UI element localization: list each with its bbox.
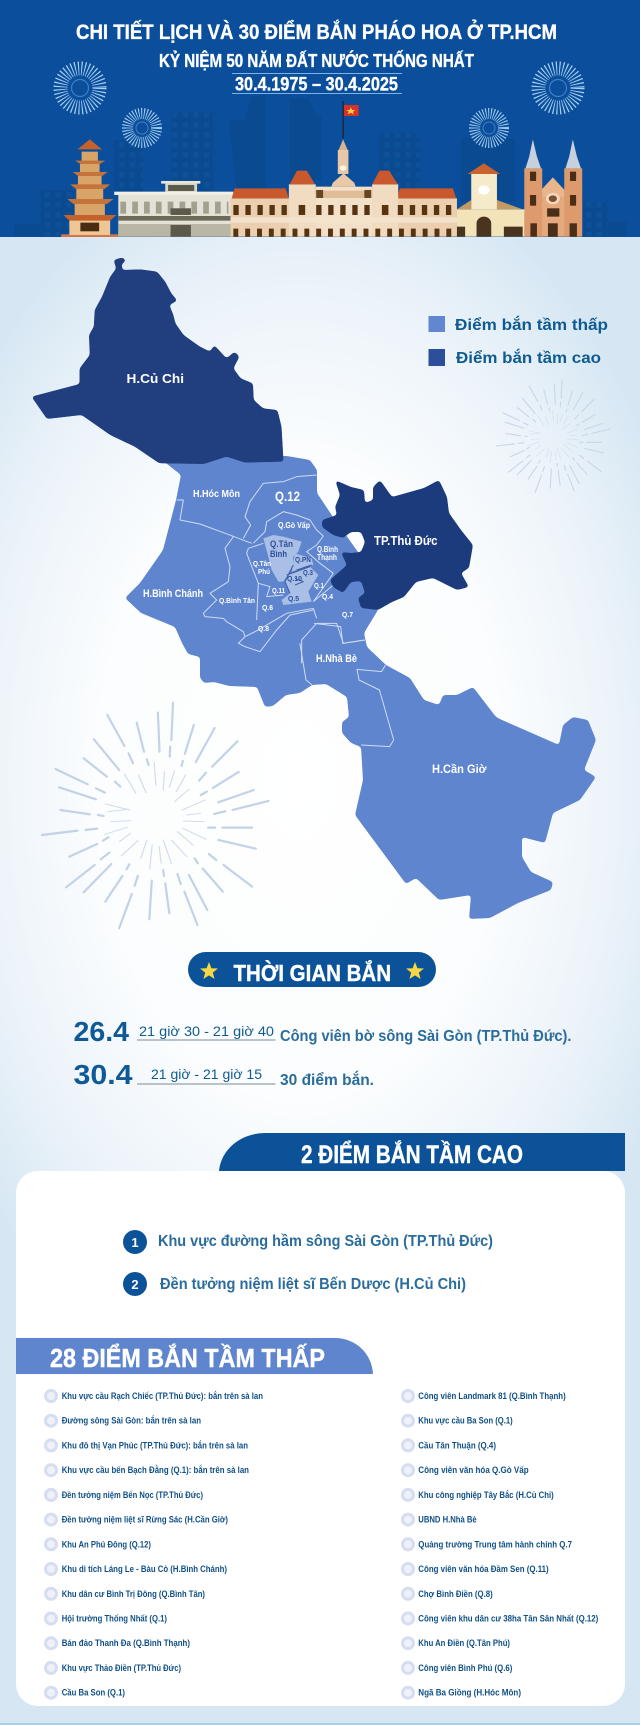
map of Ho Chi Minh City: Q.5 (288, 596, 299, 603)
map of Ho Chi Minh City: Q.3 (303, 570, 313, 577)
item: Cầu Ba Son (Q.1) (62, 1688, 125, 1698)
map labels: H.Củ Chi (126, 371, 184, 386)
schedule: 30.4: 30.4 (74, 1059, 133, 1090)
item: Khu vực cầu bến Bạch Đằng (Q.1): bắn trên sà lan (62, 1464, 249, 1475)
item 2: high altitude: Đền tưởng niệm liệt sĩ Bến Dược (H.Củ Chi) (160, 1276, 466, 1293)
icon: small firework burst (497, 380, 610, 493)
item (46, 1613, 167, 1624)
item: Cầu Tân Thuận (Q.4) (418, 1440, 496, 1450)
map labels: TP.Thủ Đức (374, 534, 438, 548)
item (402, 1440, 496, 1451)
map of Ho Chi Minh City: Bình (270, 549, 287, 560)
item: Khu An Điền (Q.Tân Phú) (418, 1638, 510, 1648)
skyline silhouette (12, 70, 628, 237)
item: Công viên khu dân cư 38ha Tân Sân Nhất (Q.12) (418, 1614, 598, 1624)
district boundaries (177, 475, 394, 747)
white hall (114, 181, 233, 237)
item (402, 1489, 554, 1500)
schedule: 30.4: 30 điểm bắn. (280, 1071, 374, 1089)
schedule: 26.4 (74, 1016, 572, 1047)
item: UBND H.Nhà Bè (418, 1515, 477, 1525)
item: Công viên văn hóa Đầm Sen (Q.11) (418, 1564, 549, 1574)
icon: large firework burst (42, 703, 268, 928)
item 1: high altitude (123, 1230, 493, 1254)
map labels: Q.1 (314, 583, 324, 590)
icon: star left (200, 962, 218, 979)
item (402, 1415, 513, 1426)
map of Ho Chi Minh City: Q.10 (287, 576, 302, 583)
map labels: Q.Bình (317, 545, 338, 554)
map labels: Q.Gò Vấp (278, 521, 310, 530)
schedule: 30.4: 21 giờ - 21 giờ 15 (151, 1066, 262, 1082)
item: Đền tưởng niệm liệt sĩ Rừng Sác (H.Cần Giờ) (62, 1515, 228, 1525)
map labels: H.Bình Chánh (143, 588, 203, 600)
city hall (231, 139, 457, 237)
map labels: Q.4 (322, 594, 333, 601)
item: Khu vực cầu Ba Son (Q.1) (418, 1416, 513, 1426)
map labels: Thạnh (317, 553, 337, 562)
header banner (0, 0, 640, 237)
schedule: 26.4: 21 giờ 30 - 21 giờ 40 (139, 1023, 274, 1039)
map labels: Q.8 (258, 626, 269, 633)
item: Khu vực Thảo Điền (TP.Thủ Đức) (62, 1663, 181, 1673)
schedule: 26.4: Công viên bờ sông Sài Gòn (TP.Thủ Đức). (280, 1028, 572, 1045)
legend: high altitude: Điểm bắn tầm cao (456, 348, 601, 367)
post office (457, 163, 531, 237)
item: Khu vực cầu Rạch Chiếc (TP.Thủ Đức): bắn trên sà lan (62, 1390, 263, 1401)
map labels: Q.6 (262, 605, 273, 612)
map labels: H.Hóc Môn (193, 488, 240, 500)
item (402, 1662, 512, 1673)
item (402, 1588, 493, 1599)
white card (16, 1171, 625, 1706)
cathedral (524, 139, 582, 237)
item 2: high altitude (123, 1272, 466, 1296)
district: H.Cu Chi (31, 257, 284, 464)
map of Ho Chi Minh City (31, 257, 596, 919)
map labels: Q.Bình Tân (219, 596, 255, 605)
item: Bán đảo Thanh Đa (Q.Bình Thạnh) (62, 1638, 190, 1648)
item: Đền tưởng niệm Bến Nọc (TP.Thủ Đức) (62, 1490, 203, 1500)
item: Khu di tích Láng Le - Bàu Cò (H.Bình Chánh) (62, 1564, 227, 1574)
legend (428, 315, 608, 367)
landmark buildings (61, 101, 582, 237)
list: left column (46, 1390, 263, 1698)
legend: low altitude: Điểm bắn tầm thấp (455, 315, 608, 334)
item: Khu dân cư Bình Trị Đông (Q.Bình Tân) (62, 1589, 205, 1599)
item 1: high altitude: 1 (131, 1235, 139, 1250)
map labels: Q.12 (275, 488, 300, 504)
item: Đường sông Sài Gòn: bắn trên sà lan (62, 1415, 201, 1426)
item: Khu đô thị Vạn Phúc (TP.Thủ Đức): bắn trên sà lan (62, 1439, 248, 1450)
item: Khu công nghiệp Tây Bắc (H.Củ Chi) (418, 1489, 554, 1500)
map labels: Q.11 (272, 588, 285, 595)
item: Ngã Ba Giồng (H.Hóc Môn) (418, 1688, 521, 1698)
map of Ho Chi Minh City: Q.PN (295, 557, 311, 564)
map labels: Q.Tân (253, 561, 271, 568)
heading: 2 high-altitude points: 2 ĐIỂM BẮN TẦM CAO (301, 1139, 523, 1169)
map labels: H.Nhà Bè (316, 653, 357, 665)
map labels: Phú (258, 569, 270, 576)
low-altitude region mass (125, 456, 596, 919)
map of Ho Chi Minh City: Q.Tân (270, 539, 293, 550)
map labels: H.Cần Giờ (432, 762, 487, 776)
section pill: firing time (188, 952, 436, 987)
item 1: high altitude: Khu vực đường hầm sông Sài Gòn (TP.Thủ Đức) (158, 1233, 493, 1250)
schedule: 26.4: 26.4 (74, 1016, 129, 1047)
item (46, 1662, 181, 1673)
district: TP.Thu Duc (322, 480, 473, 610)
map labels: Q.7 (342, 612, 353, 619)
item: Công viên văn hóa Q.Gò Vấp (418, 1465, 529, 1475)
item: Hội trường Thống Nhất (Q.1) (62, 1614, 167, 1624)
section pill: firing time: THỜI GIAN BẮN (234, 959, 391, 986)
item: Quảng trường Trung tâm hành chính Q.7 (418, 1539, 572, 1549)
title (76, 20, 557, 96)
item (46, 1687, 125, 1698)
item 2: high altitude: 2 (131, 1277, 139, 1292)
item: Chợ Bình Điền (Q.8) (418, 1589, 493, 1599)
pagoda (61, 139, 118, 237)
heading: 28 low-altitude points: 28 ĐIỂM BẮN TẦM THẤP (50, 1343, 325, 1373)
item (402, 1638, 510, 1649)
item (46, 1539, 151, 1550)
heading: 2 high-altitude points (219, 1133, 625, 1171)
item: Khu An Phú Đông (Q.12) (62, 1539, 151, 1549)
schedule: 30.4 (74, 1059, 374, 1090)
icon: star right (406, 962, 424, 979)
item: Công viên Landmark 81 (Q.Bình Thạnh) (418, 1391, 566, 1401)
title: 30.4.1975 – 30.4.2025 (235, 74, 398, 96)
title: CHI TIẾT LỊCH VÀ 30 ĐIỂM BẮN PHÁO HOA Ở TP.HCM (76, 20, 557, 44)
central pale districts (263, 535, 318, 605)
item (402, 1514, 477, 1525)
item (46, 1415, 201, 1426)
flag (342, 101, 359, 138)
list: right column (402, 1390, 598, 1698)
title: KỶ NIỆM 50 NĂM ĐẤT NƯỚC THỐNG NHẤT (159, 50, 475, 71)
item: Công viên Bình Phú (Q.6) (418, 1663, 512, 1673)
fireworks (60, 68, 578, 142)
map labels (126, 371, 487, 776)
